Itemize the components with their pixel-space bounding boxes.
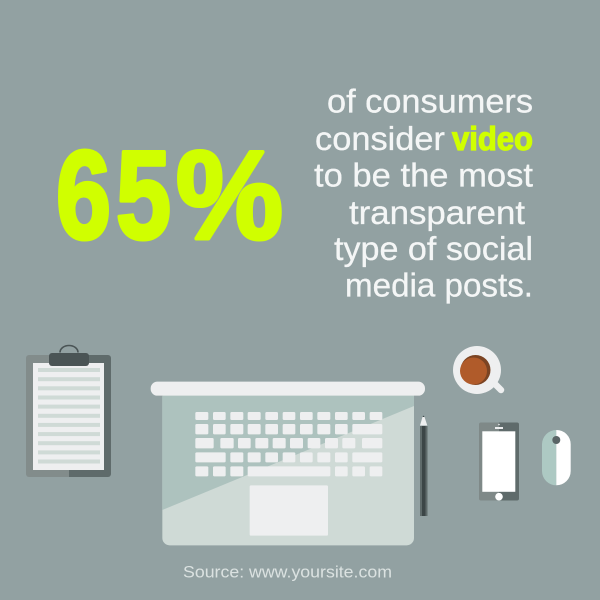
statement text: video [452, 120, 533, 157]
icon: mouse [542, 430, 571, 485]
icon: coffee cup [453, 346, 501, 394]
statement text: transparent [349, 194, 525, 231]
statement text: consider [315, 120, 445, 157]
icon: clipboard [26, 346, 111, 477]
big stat: 65%: % [176, 126, 283, 266]
icon: pencil [420, 416, 427, 516]
big stat: 65%: 5 [116, 126, 171, 266]
icon: laptop [151, 382, 425, 545]
icon: smartphone [479, 422, 519, 501]
big stat: 65% [56, 126, 283, 266]
source line: Source: www.yoursite.com [183, 562, 392, 582]
statement text: to be the most [314, 156, 533, 194]
statement text [314, 82, 533, 304]
statement text: of consumers [327, 82, 533, 120]
statement text: media posts. [345, 266, 533, 304]
big stat: 65%: 6 [56, 126, 111, 266]
keyboard [195, 412, 382, 476]
statement text: type of social [334, 230, 533, 267]
